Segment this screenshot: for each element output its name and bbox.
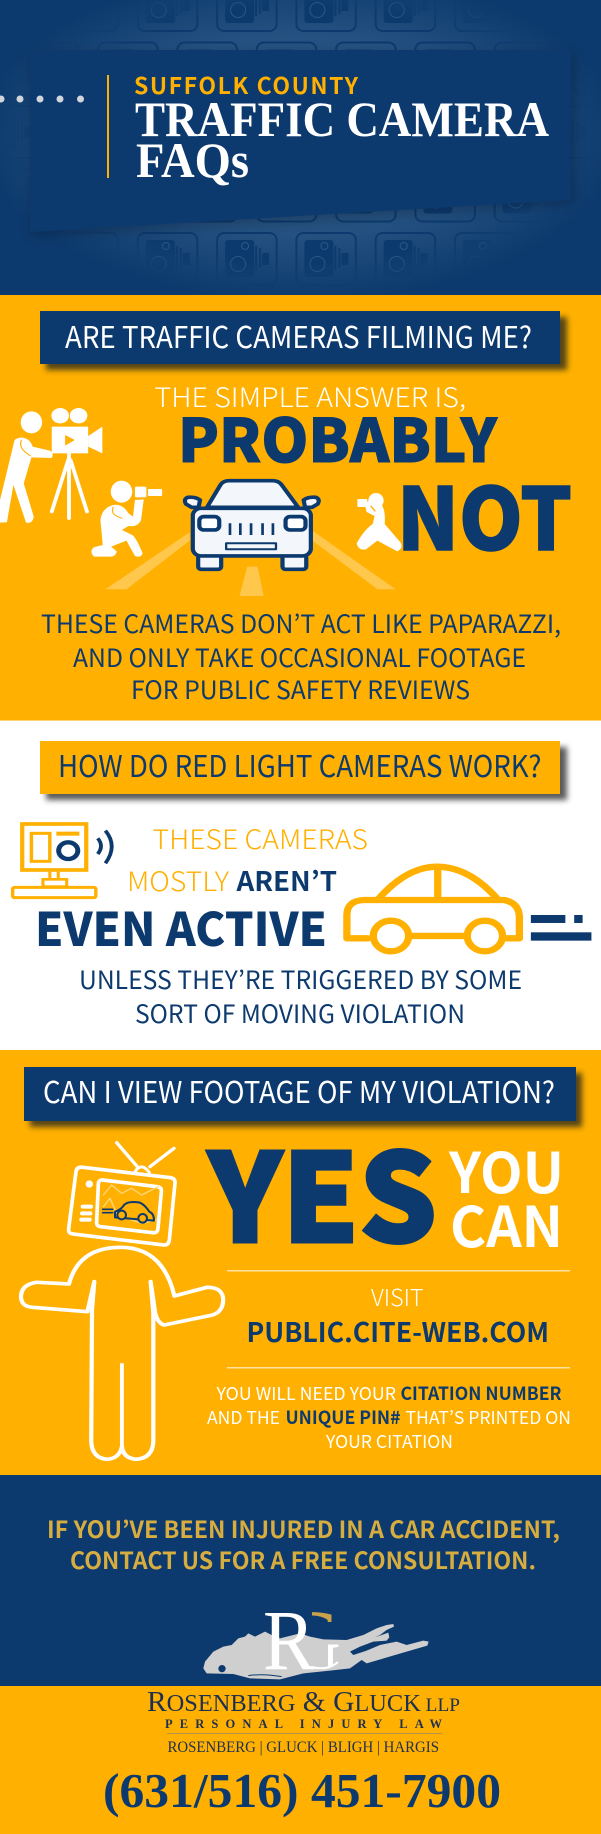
text: these cameras mostly aren't: MOSTLY	[127, 860, 229, 899]
text: citation note: AND THE	[207, 1404, 280, 1430]
logo monogram: R	[263, 1592, 316, 1688]
body text: triggered	[79, 961, 522, 1031]
panel: firm footer	[0, 1686, 601, 1834]
tagline: PERSONAL INJURY LAW	[165, 1717, 442, 1731]
title: FAQs: FAQs	[136, 132, 249, 188]
text: free consultation: IF YOU’VE BEEN INJURED IN A CAR ACCIDENT,	[47, 1511, 560, 1545]
text: you can: CAN	[450, 1183, 563, 1264]
body text: paparazzi: AND ONLY TAKE OCCASIONAL FOOTAGE	[73, 639, 526, 675]
gold vertical rule	[107, 75, 109, 178]
text: these cameras mostly aren't	[127, 818, 368, 899]
icon: speed lines	[531, 915, 591, 941]
decorative dots	[0, 96, 84, 102]
text: citation note: YOUR CITATION	[325, 1428, 453, 1454]
text: even active: EVEN ACTIVE	[35, 894, 327, 960]
text: the simple answer is: THE SIMPLE ANSWER IS,	[154, 376, 466, 415]
icon: cameraman with tripod	[0, 408, 102, 523]
body text: paparazzi	[41, 605, 561, 707]
text: you can	[448, 1129, 564, 1264]
logo monogram: G	[279, 1592, 341, 1688]
panel: header	[0, 0, 601, 295]
icon: person with tv head	[21, 1143, 223, 1459]
body text: triggered: SORT OF MOVING VIOLATION	[135, 995, 465, 1031]
heading box: HOW DO RED LIGHT CAMERAS WORK?	[58, 742, 542, 786]
heading box: ARE TRAFFIC CAMERAS FILMING ME?	[65, 313, 532, 357]
title banner	[0, 50, 575, 236]
icon: kneeling photographer	[91, 481, 162, 557]
logo monogram: G	[279, 1592, 341, 1688]
text: citation note: THAT’S PRINTED ON	[406, 1404, 571, 1430]
icon: road lines	[105, 531, 396, 596]
text: visit: VISIT	[371, 1279, 424, 1313]
title: Traffic Camera: TRAFFIC CAMERA	[135, 91, 549, 147]
text: free consultation	[47, 1511, 560, 1576]
body text: triggered: UNLESS THEY’RE TRIGGERED BY SOME	[79, 961, 522, 997]
tv head	[69, 1143, 175, 1245]
text: citation note: YOU WILL NEED YOUR	[216, 1380, 396, 1406]
icon: long island map	[203, 1624, 429, 1679]
logo monogram	[265, 1612, 338, 1670]
panel: call to action	[0, 1475, 601, 1686]
icon: car side view	[347, 867, 519, 951]
text: citation note: UNIQUE PIN#	[286, 1404, 400, 1430]
panel: are traffic cameras filming me	[0, 295, 601, 720]
heading box: CAN I VIEW FOOTAGE OF MY VIOLATION?	[43, 1068, 555, 1112]
text: not: NOT	[397, 450, 572, 575]
body text: paparazzi: THESE CAMERAS DON’T ACT LIKE PAPARAZZI,	[41, 605, 561, 641]
text: citation note	[207, 1380, 571, 1454]
body text: paparazzi: FOR PUBLIC SAFETY REVIEWS	[131, 671, 470, 707]
text: probably: PROBABLY	[178, 393, 498, 480]
body outline	[21, 1247, 223, 1459]
icon: car front	[185, 481, 319, 569]
background camera icon pattern	[108, 0, 523, 272]
title: Suffolk County: SUFFOLK COUNTY	[134, 67, 359, 101]
text: yes: YES	[206, 1101, 437, 1278]
text: these cameras mostly aren't: AREN’T	[235, 860, 337, 899]
heading box	[24, 1067, 582, 1127]
panel: can I view footage	[0, 1050, 601, 1475]
text: website: PUBLIC.CITE-WEB.COM	[246, 1311, 549, 1350]
text: citation note: CITATION NUMBER	[400, 1380, 562, 1406]
icon: crouching photographer	[357, 493, 401, 551]
text: free consultation: CONTACT US FOR A FREE CONSULTATION.	[70, 1542, 536, 1576]
tv car	[103, 1202, 154, 1223]
firm name: ROSENBERG & GLUCK LLP	[147, 1686, 460, 1718]
text: you can: YOU	[448, 1129, 564, 1210]
partner names: ROSENBERG | GLUCK | BLIGH | HARGIS	[168, 1739, 439, 1756]
icon: red light camera monitor	[13, 824, 112, 898]
panel: how do red light cameras work	[0, 720, 601, 1050]
text: these cameras mostly aren't: THESE CAMERAS	[152, 818, 368, 857]
phone number: (631/516) 451-7900	[103, 1763, 501, 1818]
